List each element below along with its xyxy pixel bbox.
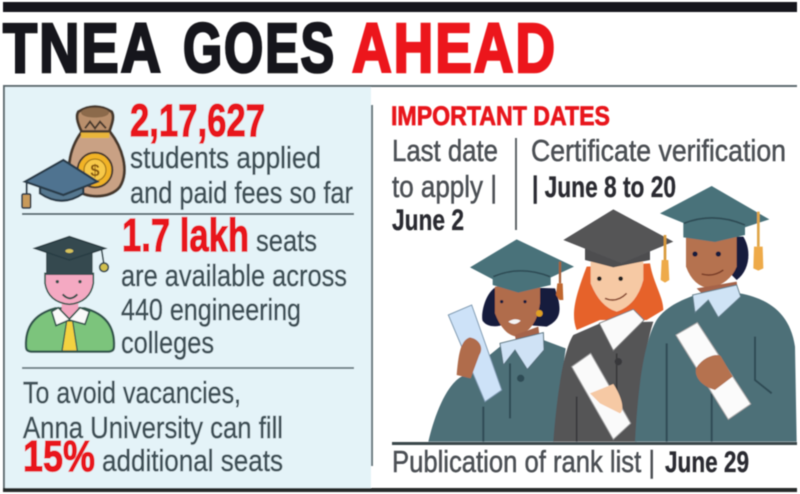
stat: additional seats: To avoid vacancies, [23, 375, 241, 410]
title: TNEA [3, 9, 163, 87]
stat: seats [121, 209, 347, 360]
stat: seats: 1.7 lakh [122, 209, 249, 261]
icon: student with cap [26, 237, 114, 352]
stat: additional seats [23, 375, 283, 481]
stat: seats: 440 engineering [121, 292, 301, 327]
heading: important dates: IMPORTANT DATES [391, 101, 610, 131]
right graduate [635, 186, 797, 442]
stat: applicants: and paid fees so far [130, 175, 353, 210]
date: last date to apply: June 2 [392, 204, 464, 237]
stat: applicants [130, 95, 353, 210]
panel: blue statistics background [4, 86, 371, 489]
stat: applicants: students applied [130, 140, 321, 175]
stat: seats: are available across [121, 258, 347, 293]
title: AHEAD [352, 9, 557, 87]
date: last date to apply: Last date [392, 133, 498, 168]
date: publication of rank list: June 29 [665, 446, 749, 479]
stat: seats: seats [256, 223, 317, 258]
stat: seats: colleges [121, 325, 214, 360]
left graduate [428, 239, 574, 442]
top rule [3, 2, 797, 12]
stat: applicants: 2,17,627 [130, 95, 265, 146]
title [3, 9, 557, 87]
stat: additional seats: Anna University can fill [23, 410, 283, 445]
stat: additional seats: 15% [23, 432, 95, 481]
icon: money bag and graduation cap: $ [90, 161, 100, 180]
date: certificate verification: | June 8 to 20 [532, 171, 676, 204]
date: last date to apply: to apply | [392, 169, 497, 204]
icon: money bag and graduation cap [22, 107, 124, 208]
date: last date to apply [392, 133, 498, 237]
title: GOES [183, 9, 336, 87]
date: certificate verification [531, 133, 786, 204]
date: publication of rank list: Publication of rank list | [392, 444, 655, 479]
middle graduate [553, 209, 673, 442]
illustration: three graduates [428, 186, 797, 442]
stat: additional seats: additional seats [102, 443, 283, 478]
